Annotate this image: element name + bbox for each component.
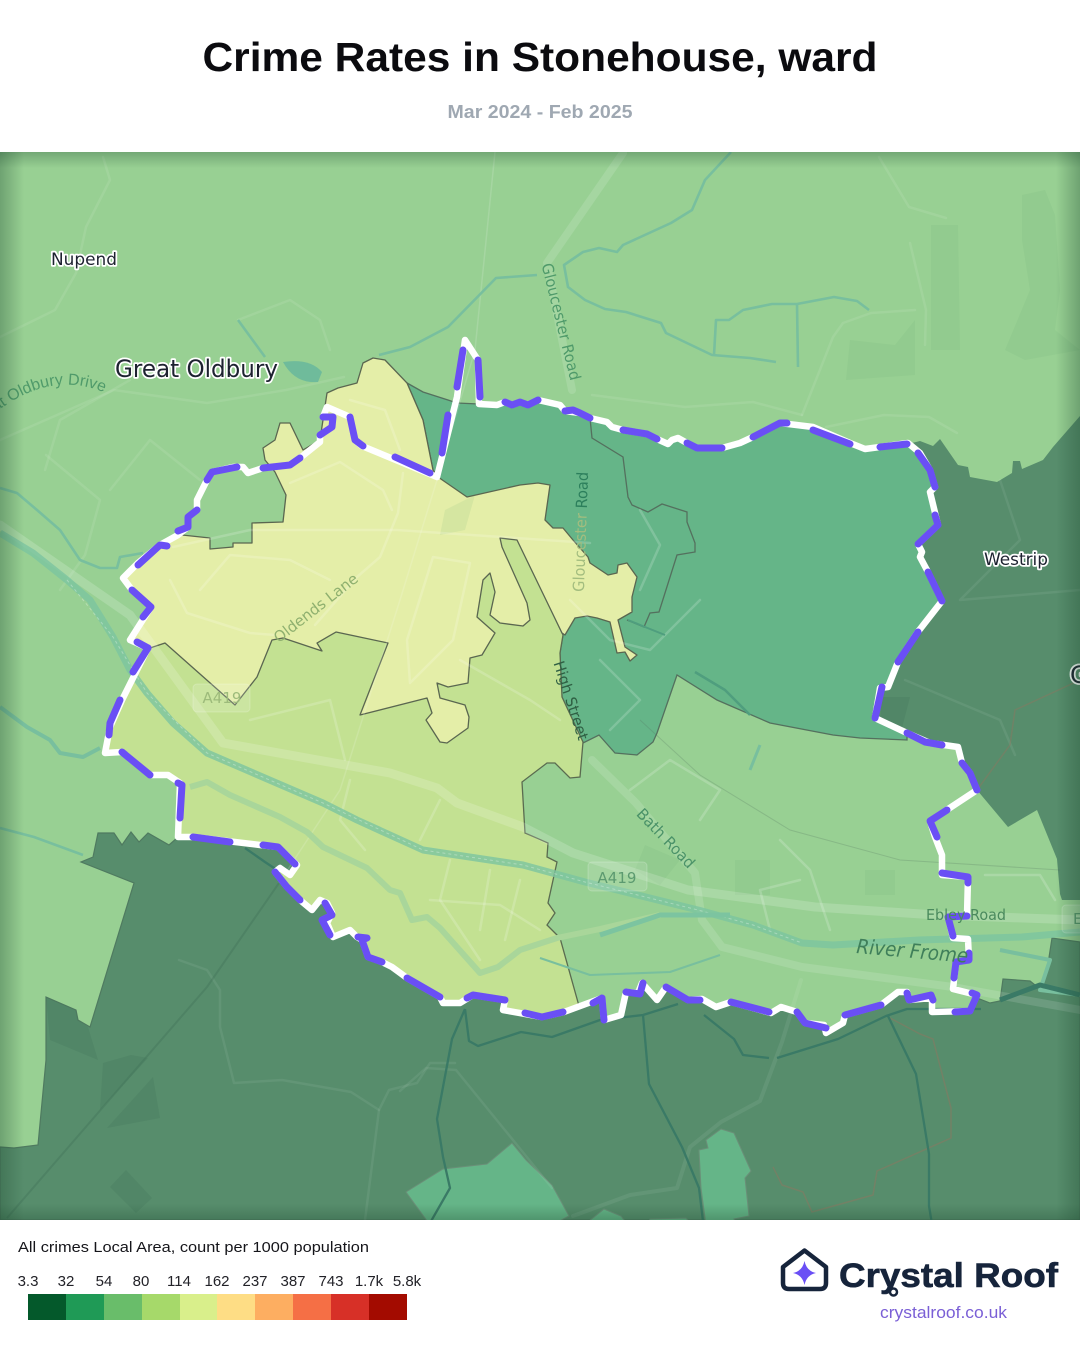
legend tick labels: 5.8k — [393, 1273, 422, 1290]
choropleth: central yellow area — [123, 358, 637, 743]
ward boundary: purple dashes — [109, 350, 977, 1028]
road label: Oldends Lane: Oldends Lane — [270, 570, 362, 647]
roads: northern lanes — [0, 157, 957, 590]
legend tick labels: 1.7k — [355, 1273, 384, 1290]
road label: Ebley Road: Ebley Road — [926, 906, 1006, 924]
road shield: A419 west — [193, 684, 250, 712]
legend — [18, 1239, 422, 1320]
title: Crime Rates in Stonehouse, ward — [202, 34, 878, 80]
choropleth: south dark area — [0, 832, 1080, 1220]
pond — [283, 361, 322, 382]
legend tick labels: 3.3 — [18, 1273, 38, 1290]
legend tick labels: 387 — [280, 1273, 306, 1290]
canal and rail band — [0, 533, 1080, 945]
dark rivers in the south — [245, 848, 1080, 1230]
choropleth: east dark area — [875, 416, 1080, 900]
place label: Westrip: Westrip — [984, 550, 1048, 570]
roads: southern lanes — [179, 480, 1080, 1220]
choropleth: south-west yellow-green area — [105, 532, 583, 1017]
brand key dot — [890, 1288, 897, 1296]
map panel — [0, 152, 1080, 1220]
railway and power line — [7, 152, 1080, 1218]
legend tick labels: 162 — [204, 1273, 230, 1290]
road: A419 main route — [0, 525, 1080, 920]
legend tick labels: 32 — [58, 1273, 74, 1290]
road: Gloucester Road corridor — [547, 153, 623, 390]
choropleth: north-east medium area — [407, 383, 942, 755]
road label: High Street: High Street — [550, 659, 592, 742]
brand url: crystalroof.co.uk — [880, 1304, 1008, 1322]
legend tick labels: 114 — [167, 1273, 191, 1290]
road shield: A419 east: A419 — [598, 869, 636, 887]
road shield: A419 east — [588, 862, 647, 891]
choropleth: central boundary inside medium area — [590, 418, 695, 627]
legend tick labels — [18, 1273, 422, 1290]
road label: Bath Road: Bath Road — [633, 805, 698, 872]
legend tick labels: 237 — [242, 1273, 268, 1290]
road label: Gloucester Road south: Gloucester Road — [570, 472, 592, 592]
place label: Great Oldbury: Great Oldbury — [115, 355, 278, 383]
legend title: All crimes Local Area, count per 1000 population — [18, 1239, 369, 1256]
faint land patches — [46, 697, 910, 1213]
rivers and streams — [0, 152, 1080, 995]
legend tick labels: 743 — [318, 1273, 344, 1290]
map base: lower crime area — [0, 152, 1080, 1220]
subtitle: date range: Mar 2024 - Feb 2025 — [448, 102, 632, 122]
road: Bath Road bypass — [592, 760, 1080, 1010]
legend tick labels: 54 — [96, 1273, 112, 1290]
place label: Nupend: Nupend — [51, 250, 117, 270]
brand name: Crystal Roof — [839, 1257, 1059, 1295]
roads: ward street network — [170, 400, 1055, 960]
ward boundary: white base line — [105, 340, 977, 1033]
faint patches on lighter land — [440, 496, 474, 535]
legend tick labels: 80 — [133, 1273, 149, 1290]
choropleth: south medium patches — [406, 1129, 751, 1225]
water label: River Frome: River Frome — [856, 934, 969, 968]
road shield: A419 west: A419 — [203, 689, 241, 707]
road label: Gloucester Road north: Gloucester Road — [538, 261, 584, 382]
roads — [0, 153, 1080, 1220]
icon: house with star — [783, 1250, 826, 1289]
map edge vignette — [0, 152, 1080, 1220]
brand logo — [783, 1250, 1059, 1322]
road shield: cut-off east — [1062, 905, 1080, 933]
legend colour scale — [28, 1294, 407, 1320]
